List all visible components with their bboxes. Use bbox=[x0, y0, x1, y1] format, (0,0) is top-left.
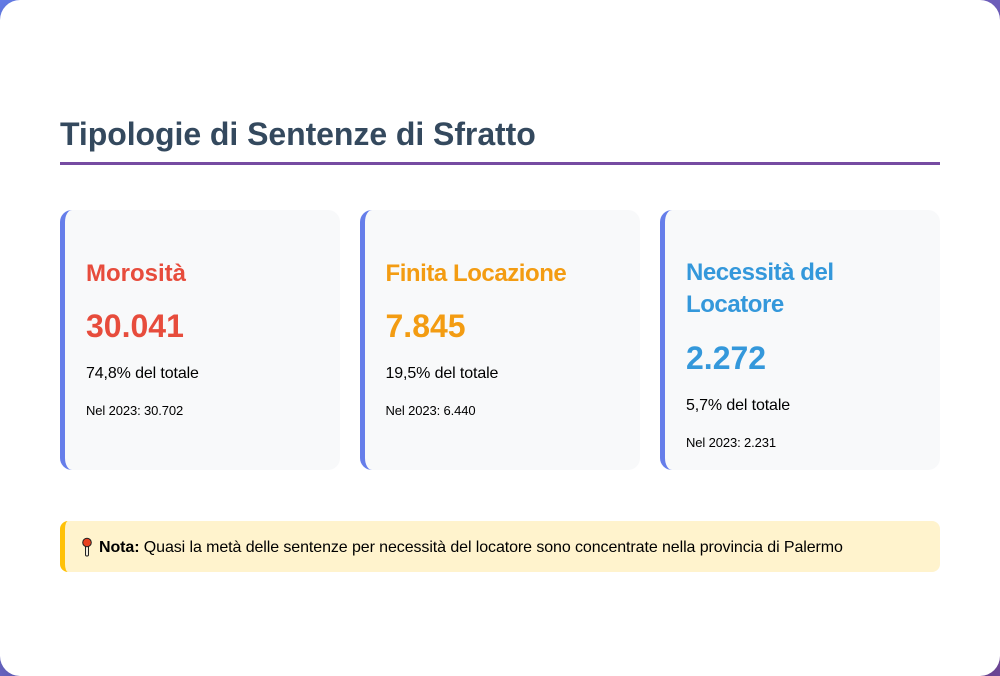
2023 comparison: Nel 2023: 6.440 bbox=[386, 403, 476, 418]
value: 30.041: 30.041 bbox=[86, 308, 184, 344]
icon: pin bbox=[82, 538, 92, 556]
note text: Nota: Quasi la metà delle sentenze per necessità del locatore sono concentrate nella provincia di Palermo bbox=[99, 539, 843, 556]
title: Tipologie di Sentenze di Sfratto bbox=[60, 116, 536, 152]
share: 19,5%: 19,5% del totale bbox=[386, 365, 498, 382]
share: 74,8%: 74,8% del totale bbox=[86, 365, 199, 382]
value: 2.272: 2.272 bbox=[686, 340, 766, 376]
heading: Morosità: Morosità bbox=[86, 260, 186, 287]
panel: Finita Locazione bbox=[360, 210, 640, 470]
2023 comparison: Nel 2023: 2.231 bbox=[686, 435, 776, 450]
2023 comparison: Nel 2023: 30.702 bbox=[86, 403, 183, 418]
heading: Necessità del Locatore: Locatore bbox=[686, 291, 784, 318]
heading: Necessità del Locatore: Necessità del bbox=[686, 259, 834, 286]
share: 5,7%: 5,7% del totale bbox=[686, 397, 790, 414]
panel: Necessità del Locatore bbox=[660, 210, 940, 470]
value: 7.845: 7.845 bbox=[386, 308, 466, 344]
panel: Morosità bbox=[60, 210, 340, 470]
callout: nota bbox=[60, 521, 940, 572]
heading: Necessità del Locatore bbox=[686, 259, 834, 318]
title underline bbox=[60, 162, 940, 165]
heading: Finita Locazione: Finita Locazione bbox=[386, 260, 566, 287]
